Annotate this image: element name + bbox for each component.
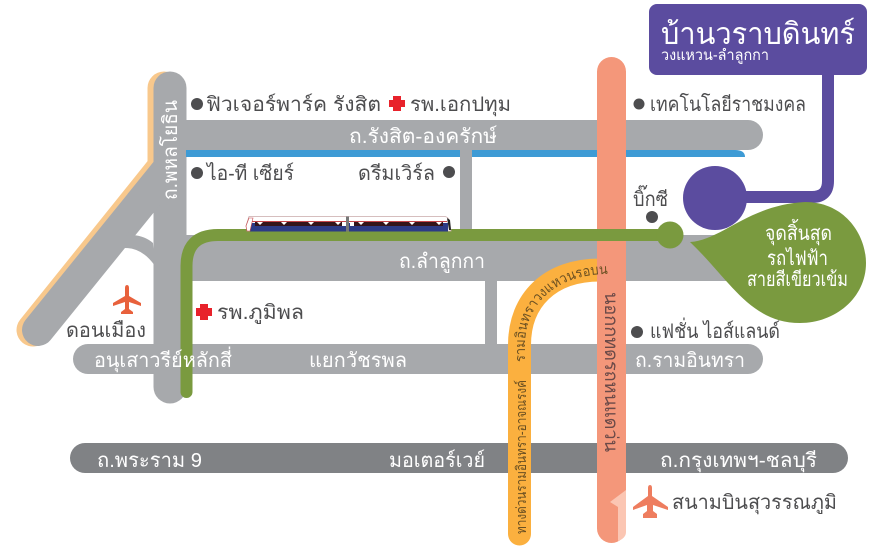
label: Fashion Island: [631, 317, 780, 343]
label: Don Mueang airport: ดอนเมือง: [66, 320, 146, 342]
label: outer ring road: [514, 266, 608, 362]
label: Ekapol hospital: รพ.เอกปทุม: [410, 94, 511, 117]
label: Future Park Rangsit: ฟิวเจอร์พาร์ค รังสิต: [206, 93, 381, 116]
callout: green line terminus: [690, 202, 866, 323]
label: Lam Luk Ka road: ถ.ลำลูกกา: [399, 251, 485, 274]
label: red road: นอกกทดรถหนแดว่น: [600, 292, 621, 452]
label: Don Mueang airport: [66, 285, 146, 342]
road: Phahonyothin: [38, 88, 170, 387]
road: motorway: [70, 443, 848, 473]
road: red vertical: [597, 57, 626, 543]
road: connector south: [485, 280, 497, 346]
road: Ram Inthra: [73, 344, 763, 374]
callout: green line terminus: รถไฟฟ้า: [767, 247, 828, 270]
label: Suvarnabhumi airport: สนามบินสุวรรณภูมิ: [672, 492, 837, 515]
watermark numeral on road: [610, 490, 626, 541]
callout: green line terminus: จุดสิ้นสุด: [765, 219, 832, 246]
road: Lam Luk Ka: [186, 235, 726, 281]
title: บ้านวราบดินทร์: [661, 17, 855, 51]
label: motorway: มอเตอร์เวย์: [389, 449, 485, 472]
icon: train: [246, 216, 451, 232]
label: Rajamangala University: เทคโนโลยีราชมงคล: [650, 93, 806, 116]
road: connector north: [460, 150, 472, 236]
label: Fashion Island: แฟชั่น ไอส์แลนด์: [650, 317, 780, 343]
label: Phahonyothin road: ถ.พหลโยธิน: [159, 100, 182, 200]
label: Ram Inthra-At Narong expressway: ทางด่วนรามอินทรา-อาจณรงค์: [513, 380, 529, 534]
callout: green line terminus: สายสีเขียวเข้ม: [747, 269, 848, 291]
subtitle: วงแหวน-ลำลูกกา: [661, 47, 769, 64]
label: Rama 9 road: ถ.พระราม 9: [97, 450, 202, 472]
purple connector: [683, 70, 828, 230]
label: Bangkok-Chonburi road: ถ.กรุงเทพฯ-ชลบุรี: [660, 450, 817, 473]
label: Rangsit-Ongkharak road: ถ.รังสิต-องครักษ์: [349, 125, 497, 148]
panel: project title: [649, 4, 867, 75]
label: Big C: บิ๊กซี: [633, 184, 668, 211]
road: outer ring orange: [520, 270, 600, 534]
label: Dream World: ดรีมเวิร์ล: [358, 162, 435, 185]
label: Bhumibol hospital: รพ.ภูมิพล: [217, 302, 304, 325]
label: Ram Inthra road: ถ.รามอินทรา: [635, 350, 745, 372]
green rail line: [186, 222, 684, 392]
label: IT Square: ไอ-ที เซียร์: [205, 162, 294, 185]
label: Watcharapol junction: แยกวัชรพล: [309, 350, 407, 372]
label: Lak Si monument: อนุเสาวรีย์หลักสี่: [94, 346, 232, 373]
road: Rangsit-Ongkharak: [186, 120, 763, 150]
label: Suvarnabhumi airport: [633, 485, 837, 518]
road: Phahonyothin edge highlight: [33, 88, 164, 330]
road: Rangsit-Ongkharak canal: [186, 150, 745, 157]
label: Big C: [633, 184, 668, 223]
